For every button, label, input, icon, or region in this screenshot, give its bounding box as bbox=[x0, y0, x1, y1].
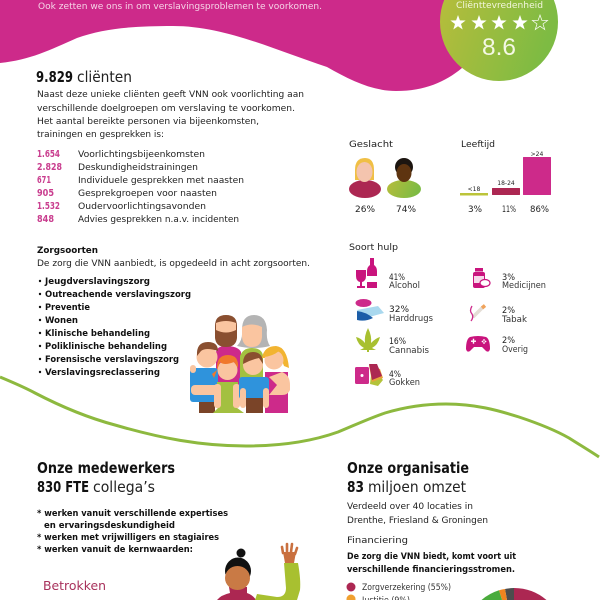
panel: soort hulp: Cannabis bbox=[389, 346, 430, 356]
panel: zorgsoorten bbox=[37, 245, 310, 378]
bar: boven 24 bbox=[523, 157, 551, 195]
center boy bbox=[239, 377, 269, 399]
panel: soort hulp: Overig bbox=[502, 345, 528, 355]
chart: leeftijd: <18 bbox=[468, 186, 481, 193]
bullet list: zorgsoorten: Preventie bbox=[45, 302, 90, 313]
list: bereikte personen: 905 bbox=[37, 188, 54, 199]
list: bereikte personen: Oudervoorlichtingsavonden bbox=[78, 201, 206, 212]
icon: medicijnen bbox=[473, 268, 490, 288]
chart: leeftijd: >24 bbox=[531, 151, 544, 158]
panel: soort hulp: Harddrugs bbox=[389, 314, 434, 324]
intro text: verschillende doelgroepen om verslaving te voorkomen. bbox=[37, 103, 295, 114]
chart: financiering pie bbox=[482, 588, 546, 600]
panel: soort hulp: 3% bbox=[502, 272, 515, 283]
list: bereikte personen: Advies gesprekken n.a.v. incidenten bbox=[78, 214, 239, 225]
bullet list: zorgsoorten: Forensische verslavingszorg bbox=[45, 354, 179, 365]
chart: geslacht bbox=[349, 139, 421, 215]
panel: zorgsoorten: De zorg die VNN aanbiedt, is opgedeeld in acht zorgsoorten. bbox=[37, 258, 310, 269]
bar: 18-24 bbox=[492, 188, 520, 195]
icon: overig bbox=[466, 336, 490, 352]
panel: soort hulp: Soort hulp bbox=[349, 242, 398, 253]
intro text bbox=[37, 89, 304, 140]
panel: onze medewerkers: 830 FTE bbox=[37, 478, 89, 496]
list: bereikte personen: 2.828 bbox=[37, 162, 62, 173]
panel: onze organisatie: verschillende financieringsstromen. bbox=[347, 564, 515, 575]
icon: man bbox=[387, 158, 421, 198]
list: bereikte personen: 1.654 bbox=[37, 149, 60, 160]
legend: financiering bbox=[346, 582, 451, 600]
illustration: waving woman bbox=[217, 544, 300, 600]
icon: cannabis bbox=[356, 328, 380, 352]
bullet list: zorgsoorten: Jeugdverslavingszorg bbox=[44, 276, 150, 287]
panel: soort hulp: 41% bbox=[389, 272, 405, 283]
bullet text: medewerkers: * werken vanuit verschillende expertises bbox=[37, 508, 228, 519]
intro text: Het aantal bereikte personen via bijeenkomsten, bbox=[37, 116, 259, 127]
panel: onze organisatie: Onze organisatie bbox=[347, 459, 469, 477]
panel: onze organisatie: Verdeeld over 40 locaties in bbox=[347, 501, 473, 512]
chart: geslacht: 26% bbox=[355, 204, 375, 215]
bullet list: zorgsoorten: Klinische behandeling bbox=[45, 328, 150, 339]
chart: leeftijd bbox=[460, 139, 551, 215]
panel: soort hulp: Alcohol bbox=[389, 281, 420, 291]
center girl bbox=[213, 382, 244, 413]
chart: geslacht: 74% bbox=[396, 204, 416, 215]
intro text: trainingen en gesprekken is: bbox=[37, 129, 164, 140]
bullet text: medewerkers: * werken vanuit de kernwaarden: bbox=[37, 544, 193, 555]
bullet list: zorgsoorten: Wonen bbox=[45, 315, 78, 326]
bullet text: medewerkers bbox=[37, 508, 228, 555]
panel: soort hulp: Tabak bbox=[501, 315, 527, 325]
panel: onze organisatie: Drenthe, Friesland & Groningen bbox=[347, 515, 488, 526]
bullet list: zorgsoorten: Poliklinische behandeling bbox=[45, 341, 167, 352]
list: bereikte personen: 848 bbox=[37, 214, 54, 225]
badge: cliënttevredenheid bbox=[440, 0, 558, 81]
list: bereikte personen: Individuele gesprekken met naasten bbox=[78, 175, 244, 186]
heading: cliënten: cliënten bbox=[77, 68, 132, 86]
divider: green wave bbox=[0, 377, 599, 457]
score: 8.6 bbox=[482, 34, 516, 61]
chart: leeftijd: Leeftijd bbox=[461, 139, 495, 150]
chart: leeftijd: 11% bbox=[502, 204, 516, 215]
icon: alcohol bbox=[356, 258, 377, 288]
panel: onze organisatie: De zorg die VNN biedt, komt voort uit bbox=[347, 551, 517, 562]
badge: cliënttevredenheid: Cliënttevredenheid bbox=[456, 0, 543, 11]
icon: tabak bbox=[470, 306, 485, 321]
bullet text: medewerkers: * werken met vrijwilligers en stagiaires bbox=[37, 532, 219, 543]
bullet list: zorgsoorten bbox=[39, 276, 191, 378]
panel: onze organisatie: miljoen omzet bbox=[368, 478, 466, 496]
panel: soort hulp: 32% bbox=[389, 304, 409, 315]
bullet text: medewerkers: en ervaringsdeskundigheid bbox=[44, 520, 175, 531]
panel: onze organisatie bbox=[346, 459, 517, 600]
panel: onze medewerkers: Onze medewerkers bbox=[37, 459, 175, 477]
panel: onze organisatie: 83 bbox=[347, 478, 364, 496]
list: bereikte personen: Deskundigheidstrainingen bbox=[78, 162, 198, 173]
intro text: Naast deze unieke cliënten geeft VNN ook voorlichting aan bbox=[37, 89, 304, 100]
chart: geslacht: Geslacht bbox=[349, 139, 393, 150]
icon: gokken bbox=[355, 364, 383, 386]
header: pink wave banner bbox=[0, 0, 500, 91]
panel: onze medewerkers: collega’s bbox=[93, 478, 155, 496]
heading: cliënten: 9.829 bbox=[36, 68, 73, 86]
rating stars bbox=[450, 15, 548, 30]
list: bereikte personen: Voorlichtingsbijeenkomsten bbox=[78, 149, 205, 160]
panel: soort hulp bbox=[349, 242, 546, 388]
panel: soort hulp: 2% bbox=[502, 335, 515, 346]
bar: onder 18 bbox=[460, 193, 488, 196]
panel: soort hulp: 4% bbox=[389, 369, 401, 380]
chart: leeftijd: 3% bbox=[468, 204, 482, 215]
kernwaarde: Betrokken bbox=[43, 578, 106, 593]
panel: soort hulp: 16% bbox=[389, 336, 406, 347]
bullet list: zorgsoorten: Outreachende verslavingszorg bbox=[45, 289, 191, 300]
panel: onze medewerkers bbox=[37, 459, 228, 593]
bullet list: zorgsoorten: Verslavingsreclassering bbox=[45, 367, 160, 378]
grandmother bbox=[237, 315, 270, 348]
header text: Ook zetten we ons in om verslavingsproblemen te voorkomen. bbox=[38, 1, 322, 12]
illustration: family bbox=[190, 315, 290, 413]
legend: financiering: Zorgverzekering (55%) bbox=[362, 583, 451, 593]
panel: onze organisatie: Financiering bbox=[347, 535, 408, 546]
list: bereikte personen: Gesprekgroepen voor naasten bbox=[78, 188, 217, 199]
right girl bbox=[265, 372, 288, 413]
left boy bbox=[190, 368, 218, 402]
chart: leeftijd: 18-24 bbox=[497, 180, 515, 187]
panel: soort hulp: Gokken bbox=[389, 378, 420, 388]
panel: zorgsoorten: Zorgsoorten bbox=[37, 245, 98, 256]
list: bereikte personen bbox=[37, 149, 244, 225]
heading: cliënten bbox=[36, 68, 132, 86]
chart: leeftijd: 86% bbox=[530, 204, 549, 215]
list: bereikte personen: 1.532 bbox=[37, 201, 60, 212]
panel: soort hulp: 2% bbox=[502, 305, 515, 316]
list: bereikte personen: 671 bbox=[37, 175, 51, 186]
man with beard bbox=[216, 346, 241, 385]
panel: soort hulp: Medicijnen bbox=[502, 281, 546, 291]
icon: woman bbox=[349, 158, 381, 198]
icon: harddrugs bbox=[356, 299, 384, 321]
